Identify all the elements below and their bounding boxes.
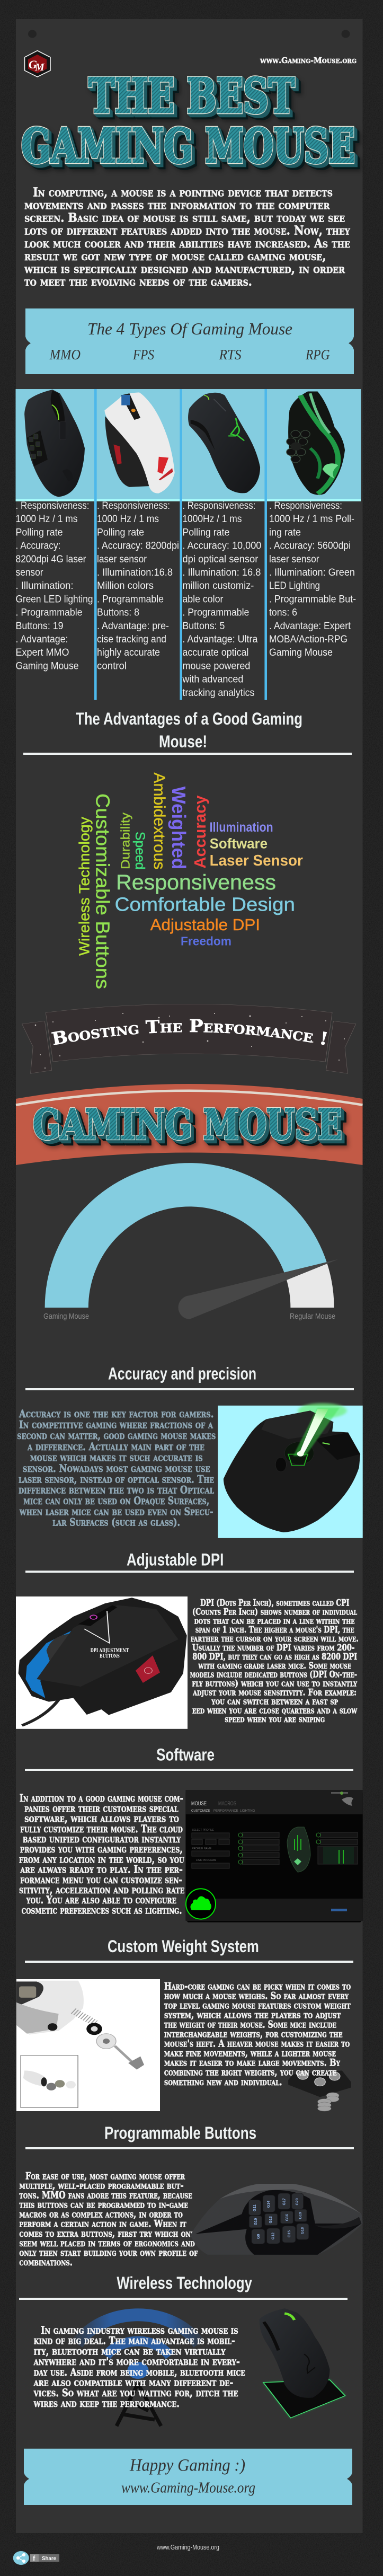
red arc band — [16, 1084, 362, 1165]
programmable paragraph: only then start building your own profile of — [19, 2247, 198, 2259]
spec column: RPG: . Illumination: Green — [269, 567, 355, 578]
software paragraph: sitivity, acceleration and polling rate — [19, 1883, 184, 1896]
footer url: www.Gaming-Mouse.org — [156, 2543, 219, 2551]
spec column: RTS: dpi optical sensor — [182, 554, 259, 565]
gauge labels: Regular Mouse — [290, 1312, 335, 1321]
spec column: MMO: . Illumination: — [16, 580, 73, 592]
wireless paragraph: wires and keep the performance. — [33, 2397, 180, 2410]
wireless paragraph — [33, 2324, 245, 2410]
spec column: RTS: with advanced — [182, 674, 243, 685]
wireless paragraph: In gaming industry wireless gaming mouse is — [41, 2324, 238, 2336]
image: software screenshot: LINK PROGRAM — [196, 1859, 216, 1862]
programmable paragraph: this buttons can be programmed to in-game — [19, 2199, 188, 2211]
word cloud: Illumination — [210, 820, 273, 835]
programmable paragraph: tons. MMO fans adore this feature, because — [19, 2189, 192, 2201]
button labels: G15 — [288, 2230, 291, 2237]
spec column: MMO: sensor — [16, 567, 43, 578]
accuracy paragraph: mice can only be used on Opaque Surfaces, — [23, 1495, 209, 1507]
software paragraph: panies offer their customers special — [24, 1802, 179, 1814]
banner text: Happy Gaming :) — [129, 2456, 245, 2475]
heading: software: Software — [156, 1745, 215, 1764]
image: software screenshot — [185, 1790, 363, 1922]
gauge labels — [43, 1312, 335, 1321]
title: The Best Gaming Mouse — [21, 68, 355, 173]
intro paragraph: look much cooler and their abilities have increased. As the — [24, 236, 350, 251]
accuracy paragraph: second can matter, good gaming mouse makes — [17, 1430, 216, 1442]
column labels: RPG — [305, 347, 329, 363]
wireless paragraph: day use. Aside from being mobile, bluetooth mice — [34, 2366, 245, 2378]
intro paragraph — [24, 185, 350, 289]
word cloud: Speed — [132, 832, 147, 869]
word cloud: Adjustable DPI — [150, 915, 260, 934]
spec column: RPG: 1000 Hz / 1 ms Poll- — [269, 514, 354, 525]
programmable paragraph: perform a certain action in game. When it — [19, 2218, 186, 2230]
image: weight tray — [288, 2070, 351, 2111]
gauge labels: Gaming Mouse — [43, 1312, 89, 1321]
heading: programmable buttons: Programmable Buttons — [104, 2123, 256, 2142]
panel: mouse image strip — [16, 389, 361, 501]
wireless paragraph: anywhere and it's more comfortable in every- — [33, 2356, 240, 2368]
button labels: G20 — [296, 2198, 299, 2206]
spec column: MMO: . Accuracy: — [16, 541, 60, 552]
spec column: FPS: Buttons: 8 — [97, 607, 139, 619]
spec column: FPS: . Programmable — [97, 594, 164, 605]
programmable paragraph: macros or as complex actions, in order to — [19, 2209, 183, 2220]
spec column: MMO: . Advantage: — [16, 634, 68, 645]
title: The Best Gaming Mouse: THE BEST — [88, 68, 295, 124]
accuracy paragraph: difference between the two is that Optical — [19, 1484, 214, 1496]
spec column: FPS — [97, 500, 179, 672]
spec column: FPS: cise tracking and — [97, 634, 166, 645]
accuracy paragraph: sensor. Nowadays most gaming mouse use — [23, 1462, 210, 1475]
spec column: FPS: . Accuracy: 8200dpi — [97, 541, 179, 552]
button labels: G11 — [253, 2204, 257, 2211]
spec column: RPG — [269, 500, 356, 658]
heading: adjustable dpi: Adjustable DPI — [127, 1550, 224, 1569]
programmable paragraph: multiple, well-placed programmable but- — [19, 2180, 184, 2191]
icon: MMO mouse — [24, 390, 85, 497]
accuracy paragraph: Accuracy is one the key factor for gamers. — [19, 1408, 214, 1420]
image: software screenshot: LIGHTING — [240, 1810, 255, 1813]
heading: advantages: The Advantages of a Good Gaming — [76, 709, 302, 728]
spec column: MMO: Polling rate — [16, 527, 63, 538]
word cloud — [76, 773, 303, 989]
weight paragraph: something new and individual. — [164, 2076, 282, 2088]
software paragraph: fully customize their mouse. The cloud — [20, 1822, 183, 1835]
icon: green cloud — [186, 1889, 216, 1919]
heading: advantages: Mouse! — [159, 732, 207, 751]
column labels: FPS — [132, 347, 154, 363]
spec column: RTS: . Accuracy: 10,000 — [182, 541, 261, 552]
programmable paragraph: seem well placed in terms of ergonomics and — [19, 2237, 195, 2249]
accuracy paragraph: mouse which makes it such accurate is — [30, 1451, 203, 1463]
wireless paragraph: kind of big deal. The main advantage is mobil- — [34, 2334, 235, 2346]
icon: GM hexagon logo: M — [34, 61, 45, 73]
intro paragraph: which is specifically designed and manufactured, in order — [24, 262, 345, 276]
dpi paragraph: you can switch between a fast sp — [211, 1696, 338, 1707]
accuracy paragraph: lar Surfaces (such as glass). — [52, 1516, 180, 1529]
weight paragraph — [164, 1981, 351, 2088]
banner text — [121, 2456, 255, 2496]
accuracy paragraph: In competitive gaming where fractions of a — [19, 1419, 213, 1431]
software paragraph: provides you with gaming preferences, — [20, 1842, 183, 1855]
spec column: FPS: . Illumination:16.8 — [97, 567, 173, 578]
column labels: RTS — [219, 347, 242, 363]
spec column: RPG: tons: 6 — [269, 607, 297, 619]
spec column: RTS: . Programmable — [182, 607, 249, 619]
spec column: FPS: laser sensor — [97, 554, 147, 565]
spec column: RTS: . Illumination: 16.8 — [182, 567, 261, 578]
word cloud: Durability — [118, 812, 132, 869]
button labels: G13 — [269, 2216, 273, 2224]
ribbon: boosting the performance: Boosting The Performance ! — [51, 1019, 327, 1045]
spec column: FPS: Million colors — [97, 580, 154, 592]
weight paragraph: combining the right weights, you can create — [164, 2066, 336, 2078]
spec column: RTS — [182, 500, 261, 699]
word cloud: Software — [210, 835, 268, 851]
chart: gauge gaming vs regular mouse — [43, 1163, 339, 1321]
image: software screenshot: MOUSE — [191, 1801, 207, 1807]
spec column: RTS: Buttons: 5 — [182, 621, 225, 632]
spec column: RPG: . Responsiveness: — [269, 500, 342, 511]
icon: share button — [13, 2551, 29, 2565]
spec column: MMO: Buttons: 19 — [16, 621, 64, 632]
intro paragraph: screen. Basic idea of mouse is still same, but today we see — [24, 211, 345, 225]
icon: GM hexagon logo — [24, 51, 50, 77]
wireless paragraph: are also compatible with many different de- — [33, 2377, 233, 2388]
spec column: MMO: Gaming Mouse — [16, 660, 78, 672]
image: software screenshot: PERFORMANCE — [213, 1810, 238, 1813]
accuracy paragraph: laser sensor, instead of optical sensor. The — [19, 1474, 214, 1486]
ribbon: boosting the performance — [22, 1004, 356, 1074]
spec column: MMO: . Programmable — [16, 607, 83, 619]
weight paragraph: system, which allows the players to adjust — [164, 2009, 341, 2021]
heading: custom weight system: Custom Weight System — [108, 1937, 259, 1956]
icon: RTS mouse — [188, 393, 260, 493]
DPI callout — [91, 1648, 129, 1659]
site url header: www.Gaming-Mouse.org — [260, 56, 357, 65]
column labels: MMO — [49, 347, 81, 363]
intro paragraph: lots of different features added into the mouse. Now, they — [24, 224, 350, 238]
spec column: RPG: MOBA/Action-RPG — [269, 634, 348, 645]
heading: wireless technology: Wireless Technology — [117, 2273, 252, 2292]
dpi paragraph: speed when you are sniping — [225, 1714, 325, 1725]
software paragraph: from any location in the world, so you — [19, 1852, 184, 1865]
software paragraph: you. You are also able to configure — [26, 1893, 176, 1906]
software paragraph: formance menu you can customize sen- — [20, 1873, 182, 1886]
spec column: RPG: . Advantage: Expert — [269, 621, 351, 632]
programmable paragraph: For ease of use, most gaming mouse offer — [25, 2170, 185, 2182]
panel: 4 types banner — [25, 308, 354, 374]
heading: advantages — [76, 709, 302, 751]
word cloud: Responsiveness — [116, 871, 276, 894]
spec column: RPG: . Accuracy: 5600dpi — [269, 541, 351, 552]
image: software screenshot: CUSTOMIZE — [191, 1810, 210, 1813]
panel screw holes — [28, 30, 350, 38]
spec column: RTS: mouse powered — [182, 660, 250, 672]
intro paragraph: to meet the evolving needs of the gamers. — [24, 275, 252, 289]
banner text: www.Gaming-Mouse.org — [121, 2480, 255, 2496]
accuracy paragraph: a difference. Actually main part of the — [27, 1441, 204, 1453]
word cloud: Wireless Technology — [76, 817, 92, 956]
word cloud: Comfortable Design — [115, 894, 295, 915]
button labels: G17 — [282, 2198, 286, 2206]
spec column: RPG: laser sensor — [269, 554, 319, 565]
facebook share control — [30, 2554, 59, 2562]
title: The Best Gaming Mouse: THE BEST — [88, 68, 295, 124]
programmable paragraph: comes to extra buttons, first try which one — [19, 2228, 195, 2239]
spec column: MMO: . Responsiveness: — [16, 500, 89, 511]
intro paragraph: In computing, a mouse is a pointing device that detects — [33, 185, 333, 199]
software paragraph: cosmetic preferences such as lighting. — [22, 1903, 182, 1916]
image: wireless mouse on charging dock — [260, 2308, 345, 2418]
software paragraph: based unified configurator instantly — [23, 1832, 181, 1845]
icon: FPS mouse — [104, 392, 175, 493]
accuracy paragraph — [17, 1408, 216, 1529]
weight paragraph: make fine movements, while a lighter mouse — [164, 2047, 336, 2059]
column dividers — [94, 389, 267, 700]
button labels: G18 — [301, 2227, 305, 2234]
intro paragraph: movements and passes the information to the computer — [24, 198, 330, 212]
intro paragraph: result we got new type of mouse called gaming mouse, — [24, 249, 326, 263]
gauge needle — [178, 1259, 339, 1319]
dpi paragraph — [190, 1598, 359, 1725]
spec column: FPS: . Advantage: pre- — [97, 621, 169, 632]
spec column: RTS: . Responsiveness: — [182, 500, 255, 511]
spec column: MMO: 8200dpi 4G laser — [16, 554, 86, 565]
programmable paragraph — [19, 2170, 198, 2268]
wireless paragraph: vices. So what are you waiting for, ditch the — [33, 2387, 238, 2399]
word cloud: Accuracy — [191, 795, 209, 869]
spec column: RTS: million customiz- — [182, 580, 254, 592]
spec column: RTS: able color — [182, 594, 224, 605]
banner heading: The 4 Types Of Gaming Mouse — [87, 319, 292, 338]
end banner — [24, 2449, 352, 2505]
facebook share control: f — [33, 2554, 35, 2562]
spec column: RTS: tracking analytics — [182, 687, 254, 699]
word cloud: Customizable Buttons — [92, 793, 113, 989]
software paragraph: In addition to a good gaming mouse com- — [20, 1792, 183, 1804]
word cloud: Laser Sensor — [210, 852, 303, 869]
spec column: FPS: 1000 Hz / 1 ms — [97, 514, 159, 525]
spec column: MMO: Green LED lighting — [16, 594, 93, 605]
software paragraph — [19, 1792, 184, 1916]
image: software screenshot: MACROS — [218, 1801, 236, 1807]
button labels: G10 — [254, 2218, 258, 2225]
DPI callout: BUTTONS — [100, 1654, 120, 1659]
spec column: FPS: . Responsiveness: — [97, 500, 170, 511]
accuracy paragraph: when laser mice can be used even on Specu- — [19, 1506, 213, 1518]
image: software screenshot: PROFILE NAME — [192, 1847, 212, 1850]
spec column: FPS: highly accurate — [97, 647, 160, 658]
button labels: G19 — [299, 2212, 302, 2219]
heading: accuracy and precision: Accuracy and precision — [108, 1364, 256, 1383]
spec column: MMO — [16, 500, 93, 672]
spec column: MMO: 1000 Hz / 1 ms — [16, 514, 77, 525]
spec column: FPS: control — [97, 660, 127, 672]
button labels: G9 — [257, 2234, 261, 2239]
DPI callout: DPI ADJUSTMENT — [91, 1648, 129, 1654]
image: mouse DPI adjustment buttons — [16, 1596, 188, 1729]
software paragraph: are always ready to play. In the per- — [20, 1863, 183, 1876]
spec column: RPG: . Programmable But- — [269, 594, 356, 605]
word cloud: Ambidextrous — [150, 773, 168, 869]
button labels: G16 — [286, 2214, 289, 2221]
spec column: RPG: LED Lighting — [269, 580, 320, 592]
wireless paragraph: ity, bluetooth mice can be taken virtually — [34, 2345, 226, 2358]
icon: wifi tower — [77, 2315, 199, 2426]
facebook share control: Share — [42, 2556, 56, 2562]
weight paragraph: makes it easier to make large movements. By — [164, 2057, 340, 2068]
spec column: RTS: . Advantage: Ultra — [182, 634, 258, 645]
spec column: RTS: accurate optical — [182, 647, 248, 658]
image: software screenshot: SELECT PROFILE — [192, 1829, 215, 1832]
button labels: G12 — [271, 2233, 275, 2239]
programmable paragraph: combinations. — [19, 2256, 73, 2268]
icon: RPG mouse — [287, 392, 345, 495]
button labels: G14 — [267, 2201, 271, 2208]
spec column: RTS: 1000Hz / 1 ms — [182, 514, 242, 525]
image: mouse with laser sensor — [218, 1403, 363, 1538]
software paragraph: software, which allows players to — [24, 1812, 179, 1825]
word cloud: Freedom — [181, 934, 231, 948]
spec column: RPG: ing rate — [269, 527, 301, 538]
spec column: FPS: Polling rate — [97, 527, 144, 538]
image: weight system exploded view — [16, 1979, 160, 2111]
image: MMO mouse side buttons — [191, 2184, 363, 2255]
column labels — [49, 347, 330, 363]
spec column: RPG: Gaming Mouse — [269, 647, 333, 658]
icon: GM hexagon logo: G — [29, 58, 37, 71]
button labels — [253, 2198, 305, 2239]
word cloud: Weighted — [168, 787, 190, 869]
spec column: MMO: Expert MMO — [16, 647, 69, 658]
spec column: RTS: Polling rate — [182, 527, 229, 538]
